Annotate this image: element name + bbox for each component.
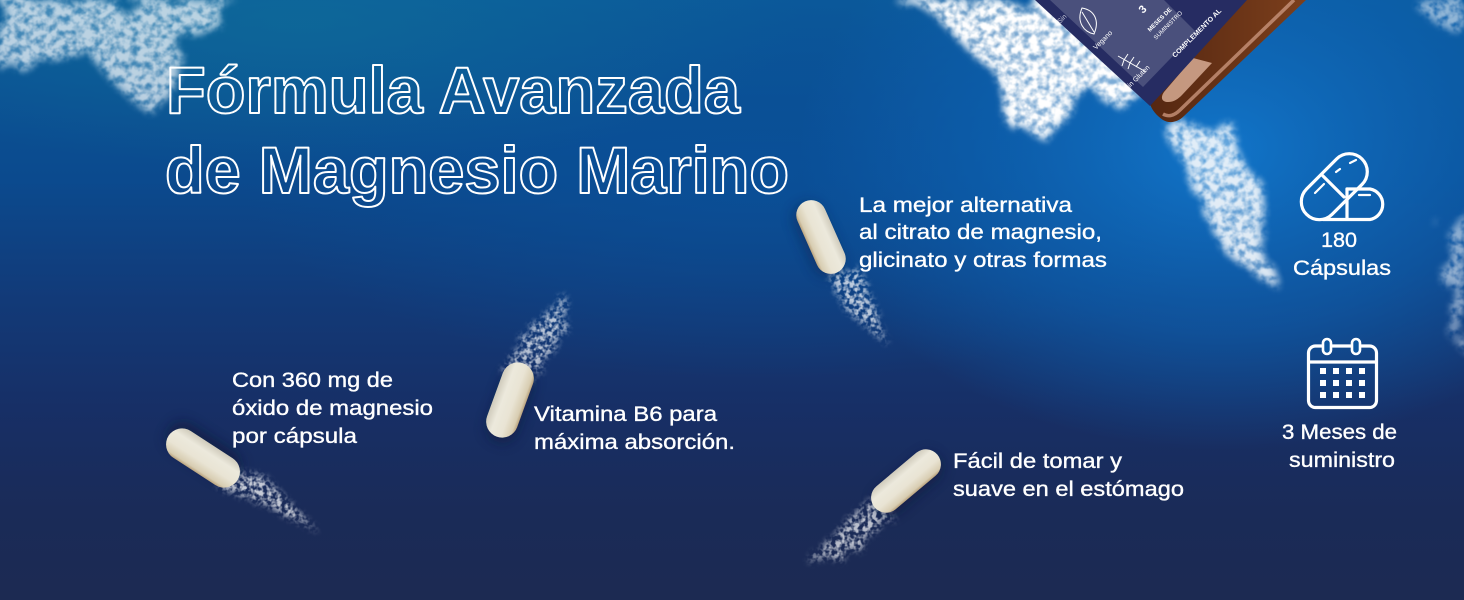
label text: MESES DE — [1147, 7, 1173, 33]
icon: capsules — [1294, 146, 1383, 227]
bottle label — [1035, 0, 1247, 106]
text: alternative — [859, 193, 1107, 272]
sea foam: right edge — [1412, 0, 1464, 350]
text: 180 capsules — [1293, 228, 1391, 280]
text: alternative: al citrato de magnesio, — [859, 220, 1102, 244]
bottle highlight — [1162, 58, 1212, 102]
text: alternative: glicinato y otras formas — [859, 248, 1107, 272]
label text: Sin — [1056, 13, 1069, 25]
wake — [502, 292, 566, 380]
label text: SUMINISTRO — [1153, 10, 1184, 41]
text: 3 months supply: suministro — [1289, 448, 1395, 472]
capsule group: alternative — [787, 195, 888, 344]
capsule group: easy to take — [808, 443, 950, 562]
label text: Vegano — [1092, 30, 1114, 51]
text: vitamin B6: Vitamina B6 para — [534, 402, 717, 426]
text: 3 months supply — [1282, 420, 1397, 472]
title: de Magnesio Marino — [165, 133, 789, 207]
bottle rim — [1163, 0, 1294, 116]
label text: Sin Gluten — [1123, 64, 1152, 92]
label lighter band — [1050, 0, 1196, 87]
label icon: leaf — [1080, 8, 1096, 34]
text: 360 mg: por cápsula — [232, 424, 357, 448]
sea foam: top left — [0, 0, 235, 112]
title — [165, 53, 789, 207]
text: 3 months supply: 3 Meses de — [1282, 420, 1397, 444]
text: alternative: La mejor alternativa — [859, 193, 1072, 217]
label text: 3 — [1137, 3, 1149, 16]
sea foam: top centre — [895, 0, 1140, 133]
bottle glass — [1150, 0, 1306, 122]
text: vitamin B6: máxima absorción. — [534, 430, 735, 454]
text: 180 capsules: 180 — [1321, 228, 1357, 252]
capsule — [157, 416, 249, 494]
text: 180 capsules: Cápsulas — [1293, 256, 1391, 280]
title: Fórmula Avanzada — [166, 53, 741, 127]
text: 360 mg — [232, 368, 433, 448]
text: easy to take: suave en el estómago — [953, 477, 1184, 501]
capsule — [480, 358, 540, 448]
text: vitamin B6 — [534, 402, 735, 454]
wake — [826, 268, 888, 344]
text: 360 mg: Con 360 mg de — [232, 368, 393, 392]
text: 360 mg: óxido de magnesio — [232, 396, 433, 420]
wake — [808, 496, 892, 562]
icon: calendar — [1308, 339, 1376, 408]
capsule — [865, 443, 950, 522]
sea foam: right of bottle — [1165, 112, 1275, 285]
label text: COMPLEMENTO AL — [1171, 7, 1224, 59]
capsule group: 360 mg — [157, 416, 318, 532]
capsule — [787, 195, 851, 282]
wake — [218, 472, 318, 532]
text: easy to take: Fácil de tomar y — [953, 449, 1122, 473]
text: easy to take — [953, 449, 1184, 501]
product bottle — [1035, 0, 1306, 122]
label icon: wheat — [1118, 54, 1146, 72]
label text — [1056, 3, 1224, 92]
capsule group: vitamin B6 — [480, 292, 566, 448]
